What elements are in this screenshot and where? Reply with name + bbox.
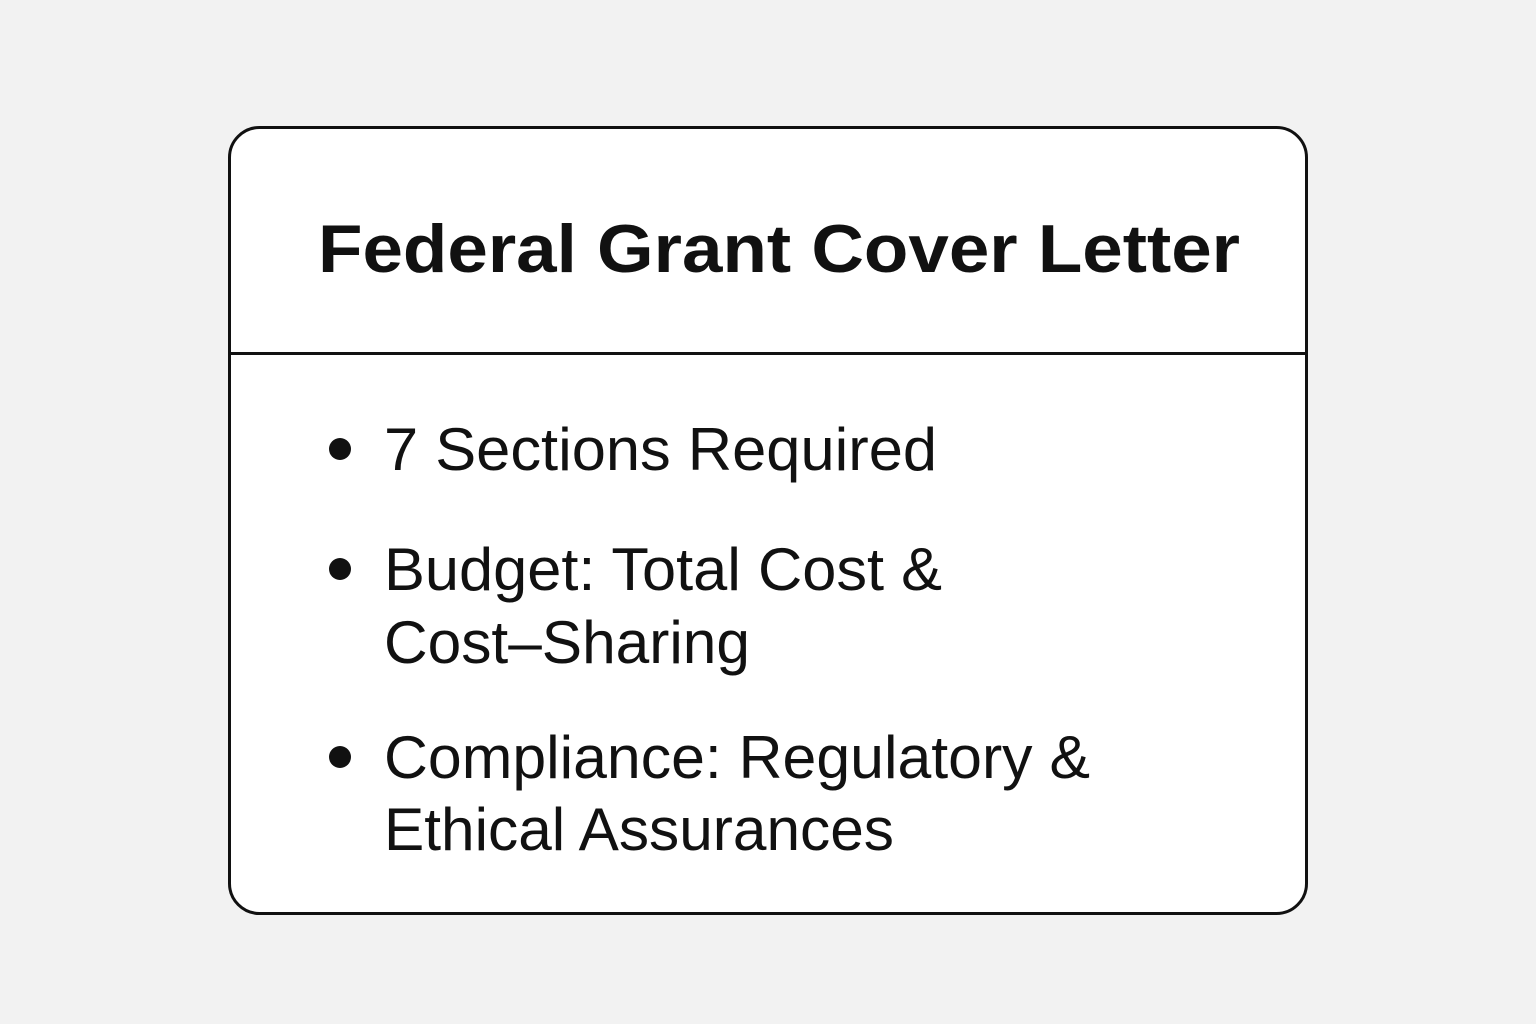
bullet 2: budget (329, 536, 942, 676)
bullet 2: budget: Budget: Total Cost & (384, 536, 942, 603)
bullet 3: compliance: Ethical Assurances (384, 796, 894, 863)
panel: cover letter card (229, 128, 1306, 914)
bullet 3: compliance: Compliance: Regulatory & (384, 724, 1090, 791)
bullet 1: sections: 7 Sections Required (384, 416, 937, 483)
bullet 2: budget: Cost–Sharing (384, 609, 750, 676)
bullet list (329, 416, 1090, 863)
bullet 3: compliance (329, 724, 1090, 863)
title: Federal Grant Cover Letter (318, 211, 1240, 287)
